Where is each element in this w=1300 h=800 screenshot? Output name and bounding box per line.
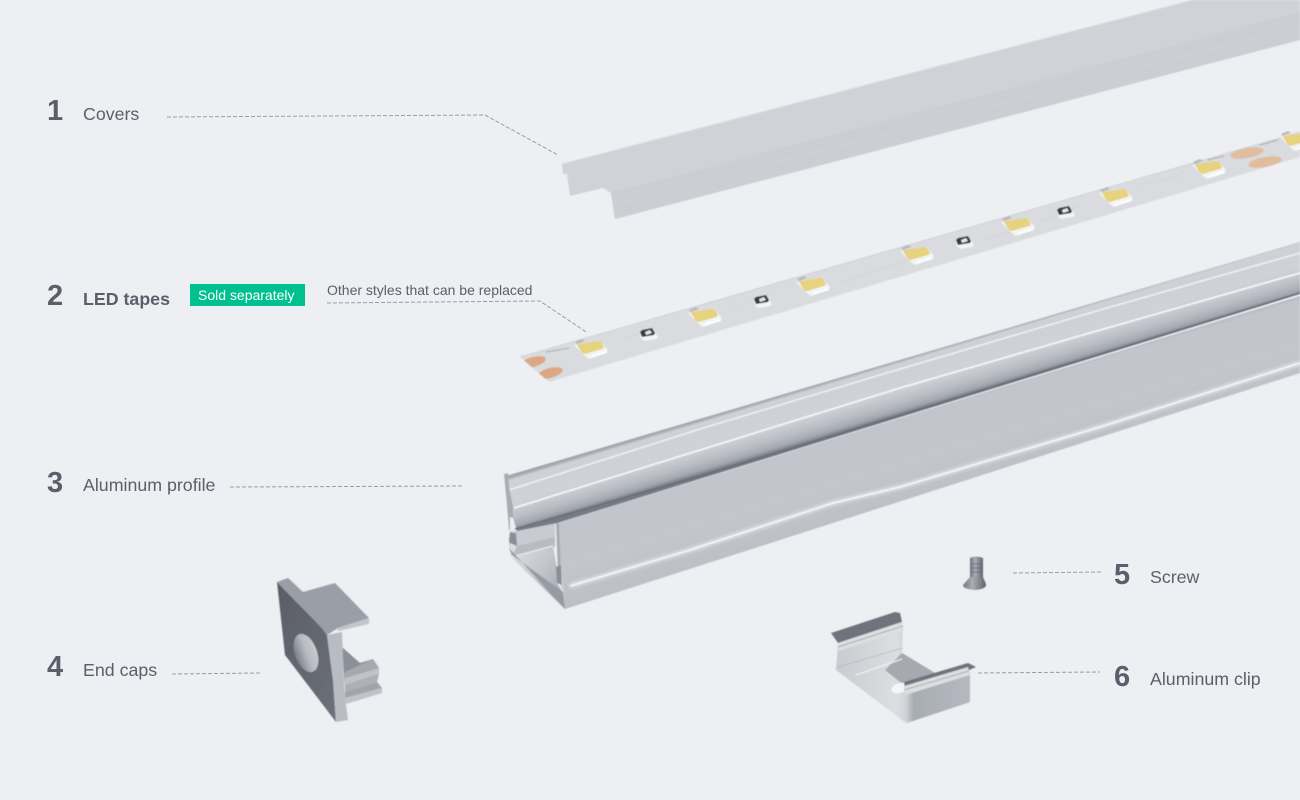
copper pads xyxy=(519,145,1283,381)
top xyxy=(277,578,369,635)
label 3: aluminum profile: Aluminum profile xyxy=(83,475,216,495)
part: aluminum clip xyxy=(831,612,976,723)
front wall xyxy=(557,296,1300,609)
leader line: clip xyxy=(978,672,1100,673)
inner shelf xyxy=(515,519,555,546)
label 2: LED tapes: LED tapes xyxy=(83,289,170,309)
label 4: end caps xyxy=(47,651,157,683)
floor of channel xyxy=(511,530,565,609)
hole xyxy=(890,681,910,695)
rim xyxy=(327,632,348,722)
dark face xyxy=(277,582,336,722)
leader line: LED tapes xyxy=(327,301,586,332)
leader line: covers xyxy=(167,115,558,155)
label 4: end caps: End caps xyxy=(83,660,157,680)
label 6: aluminum clip: 6 xyxy=(1114,661,1130,693)
fingers back xyxy=(342,647,379,686)
badge: sold separately xyxy=(190,284,305,306)
label 5: screw: 5 xyxy=(1114,559,1130,591)
part: screw xyxy=(963,556,986,590)
leader line: profile xyxy=(230,486,462,487)
upper highlights xyxy=(509,253,1300,490)
label 3: aluminum profile: 3 xyxy=(47,467,63,499)
part: LED tape xyxy=(519,131,1300,382)
front wall xyxy=(904,672,970,723)
upper body xyxy=(506,242,1300,531)
leader line: screw xyxy=(1013,572,1101,573)
label 1: covers: 1 xyxy=(47,95,63,127)
back lip xyxy=(831,612,902,643)
groove xyxy=(515,293,1300,529)
leader line: end caps xyxy=(172,673,260,674)
label 5: screw: Screw xyxy=(1150,567,1200,587)
label 6: aluminum clip: Aluminum clip xyxy=(1150,669,1261,689)
badge: sold separately: Sold separately xyxy=(198,287,295,303)
label 1: covers xyxy=(47,95,139,127)
label 2: LED tapes: 2 xyxy=(47,280,63,312)
label 4: end caps: 4 xyxy=(47,651,63,683)
label 6: aluminum clip xyxy=(1114,661,1261,693)
hole xyxy=(289,630,323,676)
part: aluminum profile xyxy=(504,242,1300,609)
note: other styles: Other styles that can be replaced xyxy=(327,282,532,298)
back wall and base xyxy=(836,625,970,723)
lower highlight xyxy=(570,363,1300,586)
part: end cap xyxy=(277,578,382,722)
label 3: aluminum profile xyxy=(47,467,216,499)
front lip xyxy=(904,663,976,690)
label 1: covers: Covers xyxy=(83,104,139,124)
label 5: screw xyxy=(1114,559,1200,591)
part: cover xyxy=(562,0,1300,219)
label 2: LED tapes xyxy=(47,280,170,312)
end cut xyxy=(504,473,513,530)
